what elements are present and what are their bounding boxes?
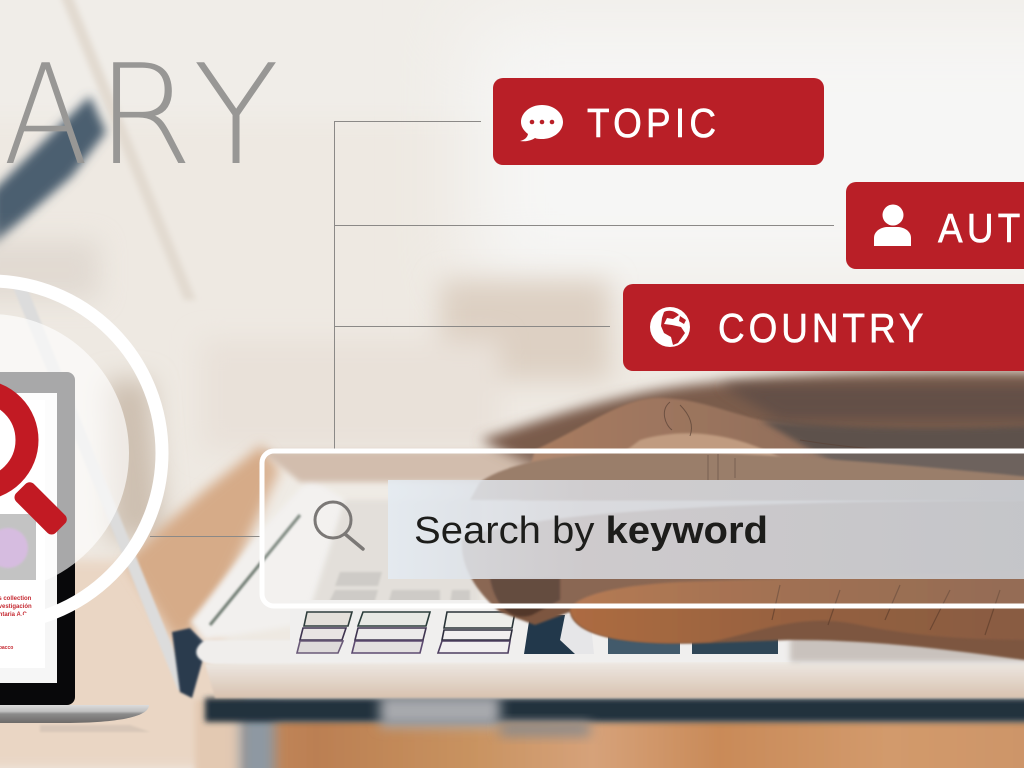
- heading fragment: ARY: [3, 34, 279, 197]
- laptop base: [194, 640, 450, 664]
- heading fragment: ARY: Y: [193, 34, 279, 196]
- screen text: [0, 596, 32, 651]
- icon: person: [874, 204, 911, 246]
- icon: search magnifier: [315, 502, 363, 549]
- translucent circle: [0, 314, 129, 592]
- icon: globe: [650, 307, 690, 347]
- heading fragment: ARY: R: [96, 35, 193, 196]
- filter tag: author: [846, 182, 1024, 269]
- heading fragment: ARY: A: [3, 36, 89, 197]
- input field: [388, 480, 1024, 579]
- filter tag: author: AUT: [938, 206, 1024, 251]
- connector lines: [150, 122, 834, 536]
- icon: speech bubble: [520, 105, 563, 141]
- search bar: [262, 451, 1024, 606]
- keys: [290, 600, 608, 640]
- thumbnail: [0, 514, 36, 580]
- laptop illustration: [0, 372, 150, 732]
- white ring: [0, 281, 162, 625]
- laptop screen: [0, 372, 75, 707]
- laptop stand: [0, 705, 149, 723]
- keyboard rows seen through the bar: [330, 572, 470, 600]
- icon: red magnifier: [0, 391, 69, 537]
- front hand: [532, 398, 824, 462]
- tan shadow at top of bar: [262, 451, 540, 482]
- filter tag: topic: [493, 78, 824, 165]
- table: [0, 557, 224, 768]
- lid edge: [58, 0, 196, 300]
- wood, lower strip: [215, 720, 1024, 768]
- filter tag: topic: TOPIC: [587, 101, 720, 146]
- filter tag: country: [623, 284, 1024, 371]
- filter tag: country: COUNTRY: [718, 306, 927, 351]
- hand strokes: [664, 402, 872, 480]
- back hand, blurred: [480, 372, 1024, 470]
- search text: Search by keyword: [414, 510, 768, 552]
- hinge: [172, 628, 207, 698]
